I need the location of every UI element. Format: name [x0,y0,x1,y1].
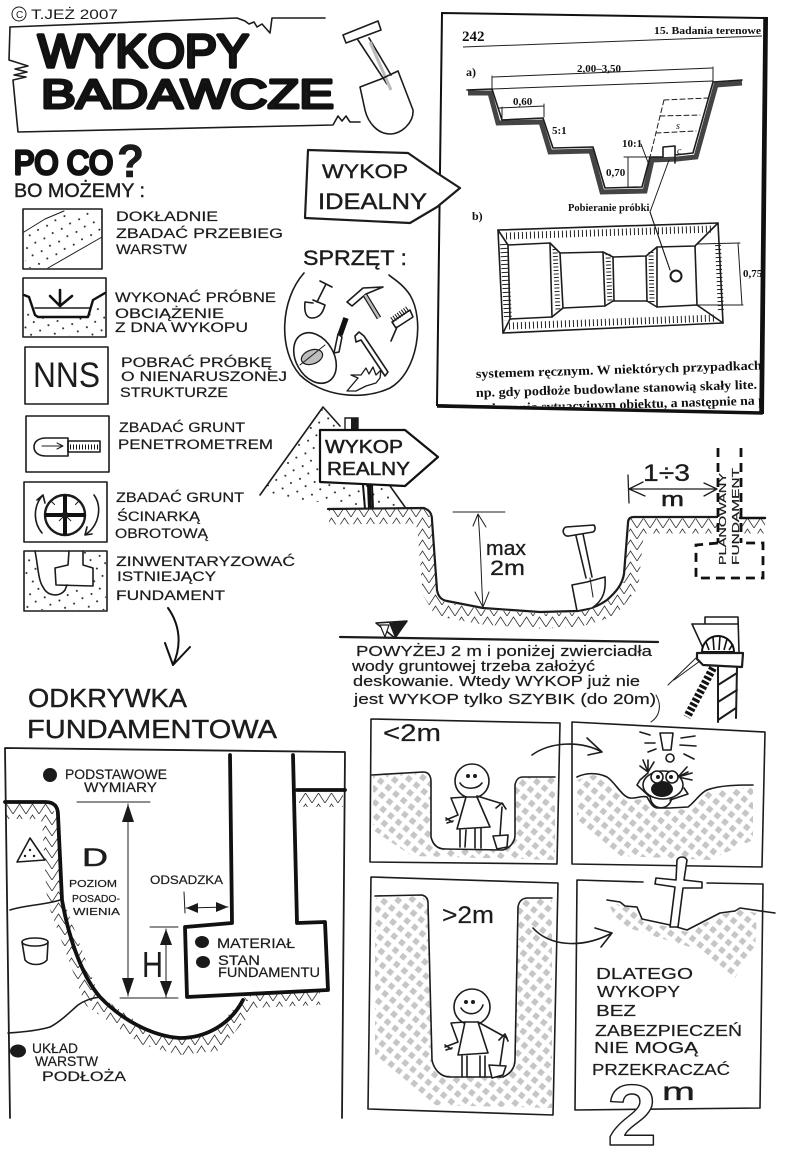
soil [577,775,753,860]
figure a: stepped trench section: Pobieranie próbki [568,203,649,214]
item 3: undisturbed sample [25,347,287,404]
planned foundation: PLANOWANY [718,473,729,565]
arrow sign: wykop idealny: WYKOP [322,162,408,183]
text: conclusion: PRZEKRACZAĆ [592,1060,730,1079]
icon: load test box [23,278,106,337]
paragraph: szybik: deskowanie. Wtedy WYKOP już nie [353,674,640,690]
figure b: trench plan: b) [472,209,483,223]
heading: odkrywka fundamentowa: FUNDAMENTOWA [27,714,278,744]
paragraph: szybik: POWYŻEJ 2 m i poniżej zwierciadła [356,642,653,660]
heading: odkrywka fundamentowa: ODKRYWKA [28,683,188,713]
water table marker [340,621,658,642]
icon: triangle stones [17,838,45,862]
note: układ warstw podłoża: UKŁAD [32,1041,78,1056]
item 4: penetrometer [26,416,273,472]
soil hatching [6,800,343,1047]
text: item 5: ZBADAĆ GRUNT [116,490,244,505]
text: item 6 [116,554,295,603]
text: item 2: WYKONAĆ PRÓBNE [115,290,276,305]
heading: odkrywka fundamentowa [27,683,278,744]
text: item 4: ZBADAĆ GRUNT [119,420,245,435]
figure: person with shovel [445,989,508,1078]
figure a: stepped trench section: a) [466,65,476,79]
arrow sign: wykop realny: REALNY [327,459,410,479]
text: conclusion: BEZ [596,1003,636,1020]
text: item 2: OBCIĄŻENIE [115,306,224,321]
panel: foundation pit diagram [5,748,345,1118]
figure a: stepped trench section: c [677,146,682,157]
heading: sprzęt: SPRZĘT : [303,247,407,270]
text: item 5: OBROTOWĄ [115,526,209,541]
figure b: trench plan [472,209,763,333]
text: conclusion: DLATEGO [596,966,693,983]
planned foundation: FUNDAMENT [731,468,742,565]
page header: 242 [462,29,484,45]
foundation outline [185,755,328,997]
text: item 3: POBRAĆ PRÓBKĘ [121,355,272,370]
figure a: stepped trench section: 2,00–3,50 [577,63,622,75]
dimension: 1÷3 m: m [661,489,684,511]
note: układ warstw podłoża: PODŁOŻA [42,1069,126,1084]
text: item 3: STRUKTURZE [120,385,228,400]
comic panel 4: grave [575,857,775,1160]
label: D poziom posadowienia [69,844,120,918]
item 2: load test [23,278,276,337]
equipment circle [285,273,418,395]
note: material: MATERIAŁ [217,936,296,951]
label: under 2m: <2m [383,720,441,747]
depth dimension: max 2m [453,512,526,607]
layer boundaries [8,900,100,1033]
note: stan fundamentu: FUNDAMENTU [218,965,320,980]
text: item 2 [115,290,276,335]
figure b: trench plan: 0,75 [743,268,763,280]
text: conclusion: NIE MOGĄ [594,1040,698,1057]
icon: brush [391,308,413,341]
icon: glove [347,367,381,391]
label: D poziom posadowienia: POZIOM [69,878,117,890]
icon: NNS box: NNS [33,356,100,395]
item 6: existing foundation [24,551,295,611]
note: material [195,936,296,951]
dimension: 1÷3 m [628,460,717,511]
text: item 6: ISTNIEJĄCY [117,569,216,584]
text: item 6: FUNDAMENT [116,588,225,603]
label: over 2m: >2m [442,902,494,929]
copyright [12,5,118,22]
figure: buried person [637,760,692,808]
text: conclusion: WYKOPY [597,984,680,1001]
arrow sign: wykop idealny [305,150,460,223]
heading: po co [14,135,144,187]
body text: systemem ręcznym. W niektórych przypadkach [476,357,763,381]
text: item 1: WARSTW [116,242,187,257]
body text: np. gdy podłoże budowlane stanowią skały lite. C [476,376,771,400]
arrow sign: wykop realny [320,430,438,486]
text: item 5: ŚCINARKĄ [117,509,201,524]
icon: cylinder [22,938,48,964]
text: item 5 [115,490,244,541]
note: podstawowe wymiary [43,767,167,795]
title text [38,25,334,117]
icon: penetrometer box [26,416,109,472]
text: item 4: PENETROMETREM [118,437,273,452]
real trench section [328,508,765,621]
icon: mine shaft headframe [668,617,743,722]
label: odsadzka: ODSADZKA [150,873,223,887]
item 5: shear vane [24,482,244,542]
dimension: H: H [142,944,163,985]
planned foundation [696,448,763,578]
label: D poziom posadowienia: POSADO- [72,893,120,905]
title text: WYKOPY [38,25,249,77]
title text: BADAWCZE [41,71,334,117]
text: item 2: Z DNA WYKOPU [115,320,248,335]
dimension: D arrow [77,802,178,998]
sign post [345,418,373,509]
icon: layers box [23,209,102,269]
note: stan fundamentu: STAN [218,953,260,968]
note: podstawowe wymiary: WYMIARY [84,780,157,795]
body text: sadowania sytuacyjnym obiektu, a następnie na p [476,392,766,416]
icon: cross [655,857,702,927]
icon: small shovel [305,281,332,318]
text: conclusion: ZABEZPIECZEŃ [595,1021,742,1040]
text: conclusion [592,966,742,1079]
big number 2 m [607,1068,695,1160]
copyright: T.JEŻ 2007 [31,5,118,22]
icon: bucket [285,325,345,391]
soil [375,896,552,1108]
label: odsadzka [150,873,228,913]
figure a: stepped trench section: 5:1 [552,125,567,137]
figure a: stepped trench section: 0,60 [513,96,533,108]
note: układ warstw podłoża: WARSTW [35,1054,98,1069]
page header: 15. Badania terenowe [654,25,761,37]
note: podstawowe wymiary: PODSTAWOWE [65,767,167,782]
icon: trench shovel [563,525,605,611]
note: układ warstw podłoża [10,1041,126,1084]
soil [373,773,555,860]
icon: pick [347,287,383,318]
dimension: 1÷3 m: 1÷3 [643,460,690,487]
figure a: stepped trench section: 0,70 [606,167,626,179]
label: D poziom posadowienia: WIENIA [73,906,120,918]
dimension: H [142,927,178,997]
text: item 4 [118,420,273,452]
heading: po co: PO CO [14,144,113,181]
text: item 3: O NIENARUSZONEJ [121,369,287,384]
arrow: panel 3 to 4 [533,928,612,947]
panel: textbook page [437,13,771,416]
text: item 6: ZINWENTARYZOWAĆ [116,554,295,569]
figure a: stepped trench section: s [676,121,680,132]
paragraph: szybik: wody gruntowej trzeba założyć [351,659,595,675]
depth dimension: max 2m: 2m [490,557,525,580]
figure a: stepped trench section [466,63,742,270]
text: item 1: ZBADAĆ PRZEBIEG [116,226,283,241]
heading: po co: ? [117,135,144,187]
soil [607,902,757,978]
icon: crowbar [355,332,388,376]
comic panel 1: trench under 2 m [370,719,560,864]
title banner [9,18,360,132]
figure: person with shovel [446,764,508,849]
icon: exclamation mark [640,732,696,762]
soil hatching [329,516,765,621]
paragraph: szybik: jest WYKOP tylko SZYBIK (do 20m) [353,692,656,708]
arrow: panel 1 to 2 [532,738,602,755]
note: stan fundamentu [196,953,320,980]
text: item 3 [120,355,287,400]
icon: title shovel [343,21,413,134]
label: D poziom posadowienia: D [82,844,108,872]
big number 2 m: m [662,1078,695,1106]
page header [462,25,762,47]
arrow down to odkrywka [165,608,190,665]
arrow sign: wykop realny: WYKOP [325,437,403,457]
arrow sign: wykop idealny: IDEALNY [318,189,427,214]
text: item 1 [116,209,283,257]
figure a: stepped trench section: 10:1 [622,138,642,150]
body text [476,360,760,409]
icon: NNS box [25,347,108,404]
icon: shear vane box [24,482,107,542]
icon: foundation box [24,551,107,611]
icon: knife [334,318,346,353]
trench outline [372,772,555,850]
depth dimension: max 2m: max [486,538,526,560]
excavation outline [5,802,243,1038]
text: item 1: DOKŁADNIE [116,209,218,224]
comic panel 2: collapse [572,722,765,867]
copyright: C [16,10,23,21]
paragraph: szybik [351,642,659,722]
item 1: layers [23,209,283,269]
subheading: bo możemy: BO MOŻEMY : [14,181,145,202]
comic panel 3: trench over 2 m [368,877,558,1115]
sand pile [260,407,405,507]
